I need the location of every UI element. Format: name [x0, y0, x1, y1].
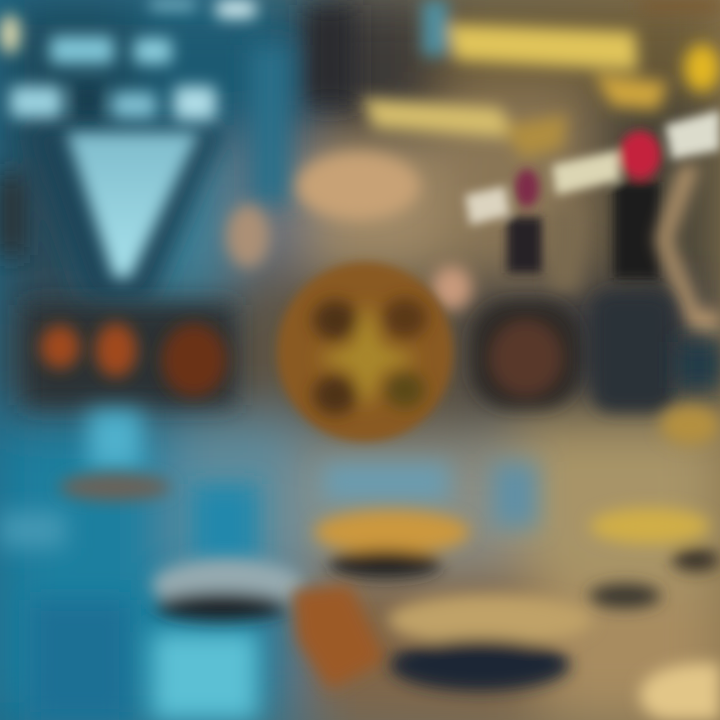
dark funnel surround [0, 5, 355, 300]
dark square right [592, 292, 674, 412]
funnel highlights [0, 0, 256, 120]
light funnel [66, 132, 200, 278]
corner plate [640, 663, 720, 720]
medium circle [161, 323, 227, 397]
centre bowl [314, 510, 470, 578]
funnel and blue panel, upper left [0, 0, 355, 300]
orange utensil [292, 585, 385, 690]
row of circles [25, 262, 720, 442]
right bowl [589, 405, 720, 608]
ribbon with red knot [465, 110, 720, 278]
small circle 2 [95, 323, 137, 377]
bowls [59, 405, 720, 720]
lower blue water [0, 410, 538, 720]
tan legs, right [550, 165, 720, 335]
yellow bars, upper right [226, 0, 720, 310]
dark coin right [472, 302, 580, 408]
large front bowl [388, 594, 592, 691]
dark band [25, 305, 235, 405]
small circle 1 [40, 325, 80, 369]
left bowl [152, 559, 304, 620]
left small plate [59, 473, 171, 501]
large central coin [277, 262, 453, 442]
